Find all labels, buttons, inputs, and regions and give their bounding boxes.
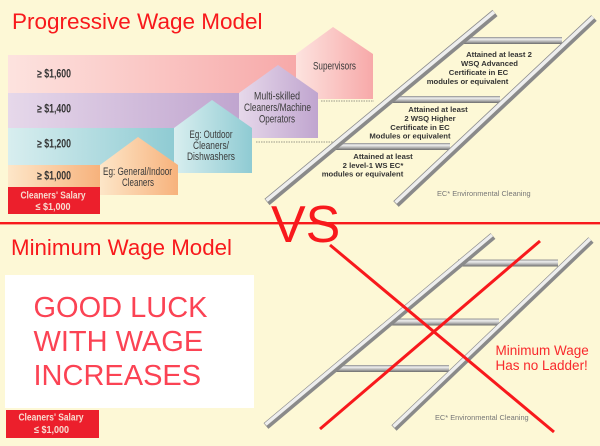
rungs [335, 37, 562, 150]
house: Multi-skilled Cleaners/Machine Operators [239, 65, 318, 138]
panel text: INCREASES [34, 360, 201, 392]
red box: Cleaners' Salary (bottom): ≤ $1,000 [34, 425, 69, 436]
red cross [320, 241, 554, 432]
requirement: bottom rung: Attained at least [353, 152, 413, 161]
white panel [5, 275, 254, 408]
red box: Cleaners' Salary (bottom) [6, 410, 99, 438]
right rail [396, 17, 594, 204]
red box: Cleaners' Salary: ≤ $1,000 [36, 202, 71, 213]
requirement: bottom rung [322, 152, 413, 178]
house: Supervisors [296, 27, 373, 99]
band: $1,600: ≥ $1,600 [37, 68, 71, 80]
house: Outdoor Cleaners/Dishwashers: Dishwashers [187, 151, 235, 163]
requirement: middle rung: Modules or equivalent [369, 132, 451, 140]
heading: Minimum Wage Model: Minimum Wage Model [11, 235, 232, 260]
requirement: top rung: Certificate in EC [449, 68, 509, 77]
dotted guide: middle [256, 141, 336, 143]
requirement: top rung: Attained at least 2 [466, 50, 532, 59]
house: Outdoor Cleaners/Dishwashers [174, 100, 252, 173]
footnote: EC* Environmental Cleaning [437, 189, 531, 198]
band: $1,200 [8, 128, 174, 165]
band: $1,200: ≥ $1,200 [37, 138, 71, 150]
panel text: WITH WAGE [34, 326, 203, 358]
panel text: GOOD LUCK [34, 292, 208, 324]
red box: Cleaners' Salary [8, 187, 100, 214]
band: $1,600 [8, 55, 296, 93]
requirement: middle rung [369, 105, 468, 140]
callout: Minimum Wage Has no Ladder!: Minimum Wage [496, 343, 589, 358]
dotted guide: top [321, 100, 374, 102]
house: Outdoor Cleaners/Dishwashers: Eg: Outdoor [190, 129, 233, 141]
ladder: progressive wage [266, 12, 594, 204]
requirement: middle rung: Attained at least [408, 105, 468, 114]
red box: Cleaners' Salary: Cleaners' Salary [20, 190, 86, 202]
title: Progressive Wage Model: Progressive Wage Model [12, 9, 263, 34]
requirement: bottom rung: modules or equivalent [322, 170, 404, 178]
red box: Cleaners' Salary (bottom): Cleaners' Salary [18, 412, 84, 424]
requirement: bottom rung: 2 level-1 WS EC* [343, 161, 403, 170]
band: $1,400 [8, 93, 240, 128]
requirement: top rung [427, 50, 532, 86]
house: General/Indoor Cleaners: Cleaners [122, 177, 154, 189]
requirement: top rung: modules or equivalent [427, 77, 509, 86]
ladder: minimum wage [266, 235, 591, 428]
requirement: middle rung: 2 WSQ Higher [404, 114, 456, 123]
salary staircase chart [8, 27, 373, 214]
requirement: middle rung: Certificate in EC [390, 123, 450, 132]
panel text [34, 292, 208, 392]
callout: Minimum Wage Has no Ladder!: Has no Ladder! [496, 358, 588, 373]
right rail [394, 239, 591, 428]
house: Supervisors: Supervisors [313, 60, 356, 72]
footnote: EC* Environmental Cleaning [435, 413, 529, 422]
left rail [266, 12, 495, 202]
rungs [334, 260, 558, 372]
callout: Minimum Wage Has no Ladder! [496, 343, 589, 373]
house: General/Indoor Cleaners [100, 137, 178, 195]
house: General/Indoor Cleaners: Eg: General/Indoor [103, 166, 172, 178]
divider line [0, 222, 600, 224]
band: $1,400: ≥ $1,400 [37, 104, 71, 116]
requirement: top rung: WSQ Advanced [461, 59, 518, 68]
house: Multi-skilled Cleaners/Machine Operators: Operators [259, 114, 295, 126]
VS label: VS [271, 196, 340, 254]
left rail [266, 235, 493, 426]
band: $1,000: ≥ $1,000 [37, 170, 71, 182]
house: Multi-skilled Cleaners/Machine Operators: Multi-skilled [254, 90, 300, 102]
band: $1,000 [8, 165, 100, 187]
house: Multi-skilled Cleaners/Machine Operators: Cleaners/Machine [244, 102, 311, 114]
house: Outdoor Cleaners/Dishwashers: Cleaners/ [193, 140, 229, 152]
